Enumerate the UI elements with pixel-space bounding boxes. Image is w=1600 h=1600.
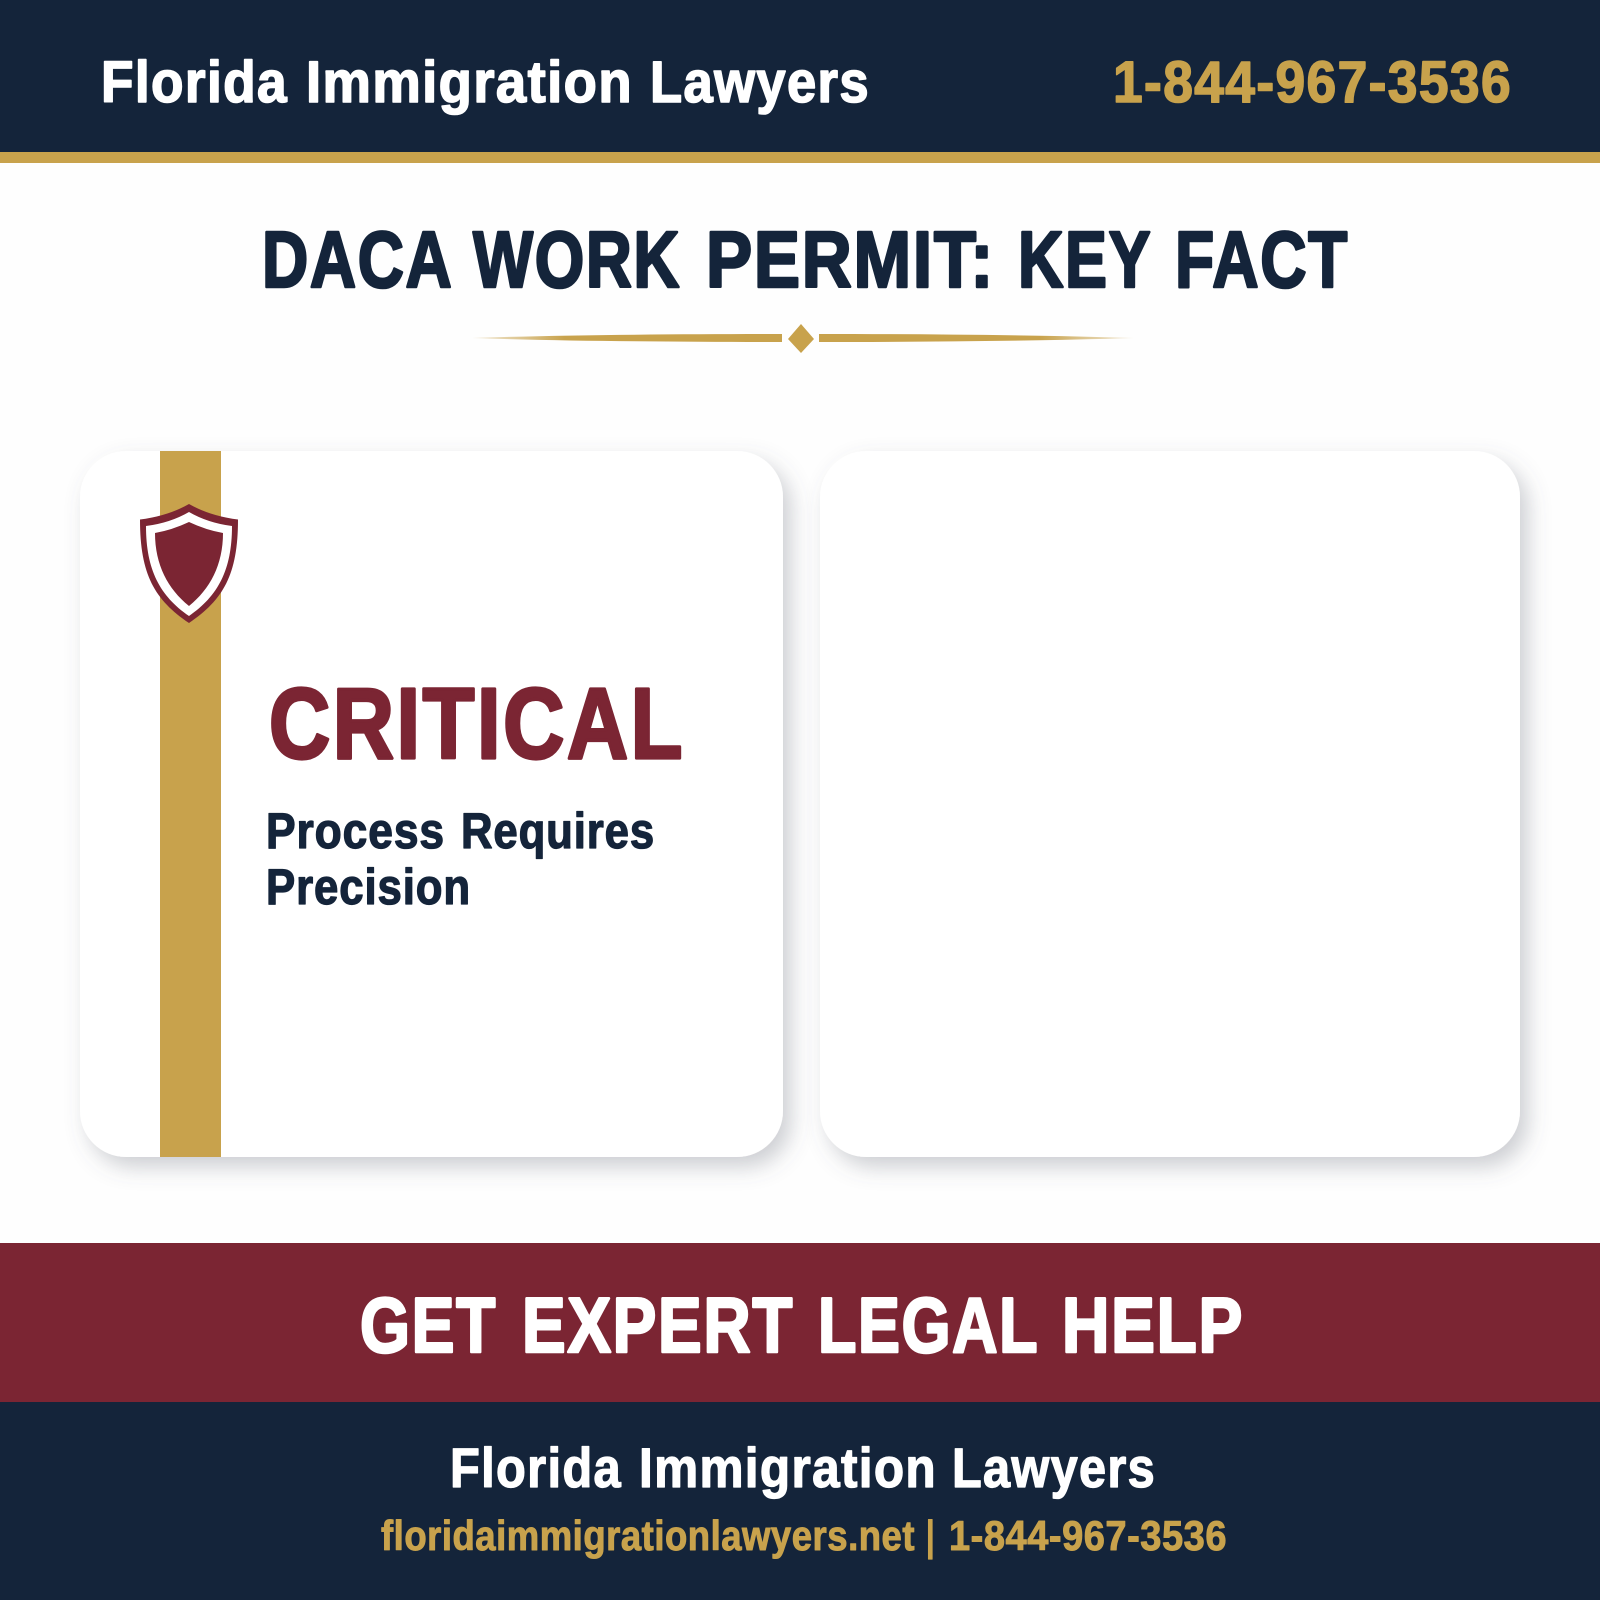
critical description: Process	[266, 803, 445, 859]
title: FACT	[1175, 215, 1349, 304]
critical description: Precision	[266, 859, 471, 915]
call to action text: GET	[360, 1281, 497, 1369]
panel: empty card	[820, 451, 1520, 1157]
header firm name: Immigration	[306, 50, 633, 115]
header phone number: 1-844-967-3536	[1113, 50, 1512, 115]
panel: critical card	[80, 451, 783, 1157]
critical description: Requires	[461, 803, 655, 859]
title: PERMIT:	[706, 215, 995, 304]
footer contact line: 1-844-967-3536	[949, 1512, 1227, 1559]
gold vertical band	[160, 451, 221, 1157]
footer firm name: Immigration	[639, 1436, 937, 1499]
header firm name: Lawyers	[650, 50, 870, 115]
footer contact line: |	[926, 1512, 935, 1560]
critical description	[266, 803, 655, 915]
title: DACA	[262, 215, 451, 304]
footer firm name: Florida	[450, 1436, 622, 1499]
title divider with diamond	[472, 324, 1134, 353]
header firm name: Florida	[101, 50, 288, 115]
title: WORK	[473, 215, 681, 304]
call to action text: EXPERT	[522, 1281, 794, 1369]
call to action text: LEGAL	[818, 1281, 1038, 1369]
call to action text: HELP	[1062, 1281, 1244, 1369]
icon: shield	[140, 504, 238, 623]
top header bar	[0, 0, 1600, 163]
call to action banner	[0, 1243, 1600, 1402]
footer contact line: floridaimmigrationlawyers.net	[381, 1512, 915, 1559]
footer firm name: Lawyers	[952, 1436, 1156, 1499]
title: KEY	[1018, 215, 1151, 304]
critical heading: CRITICAL	[269, 668, 685, 780]
footer	[0, 1402, 1600, 1600]
